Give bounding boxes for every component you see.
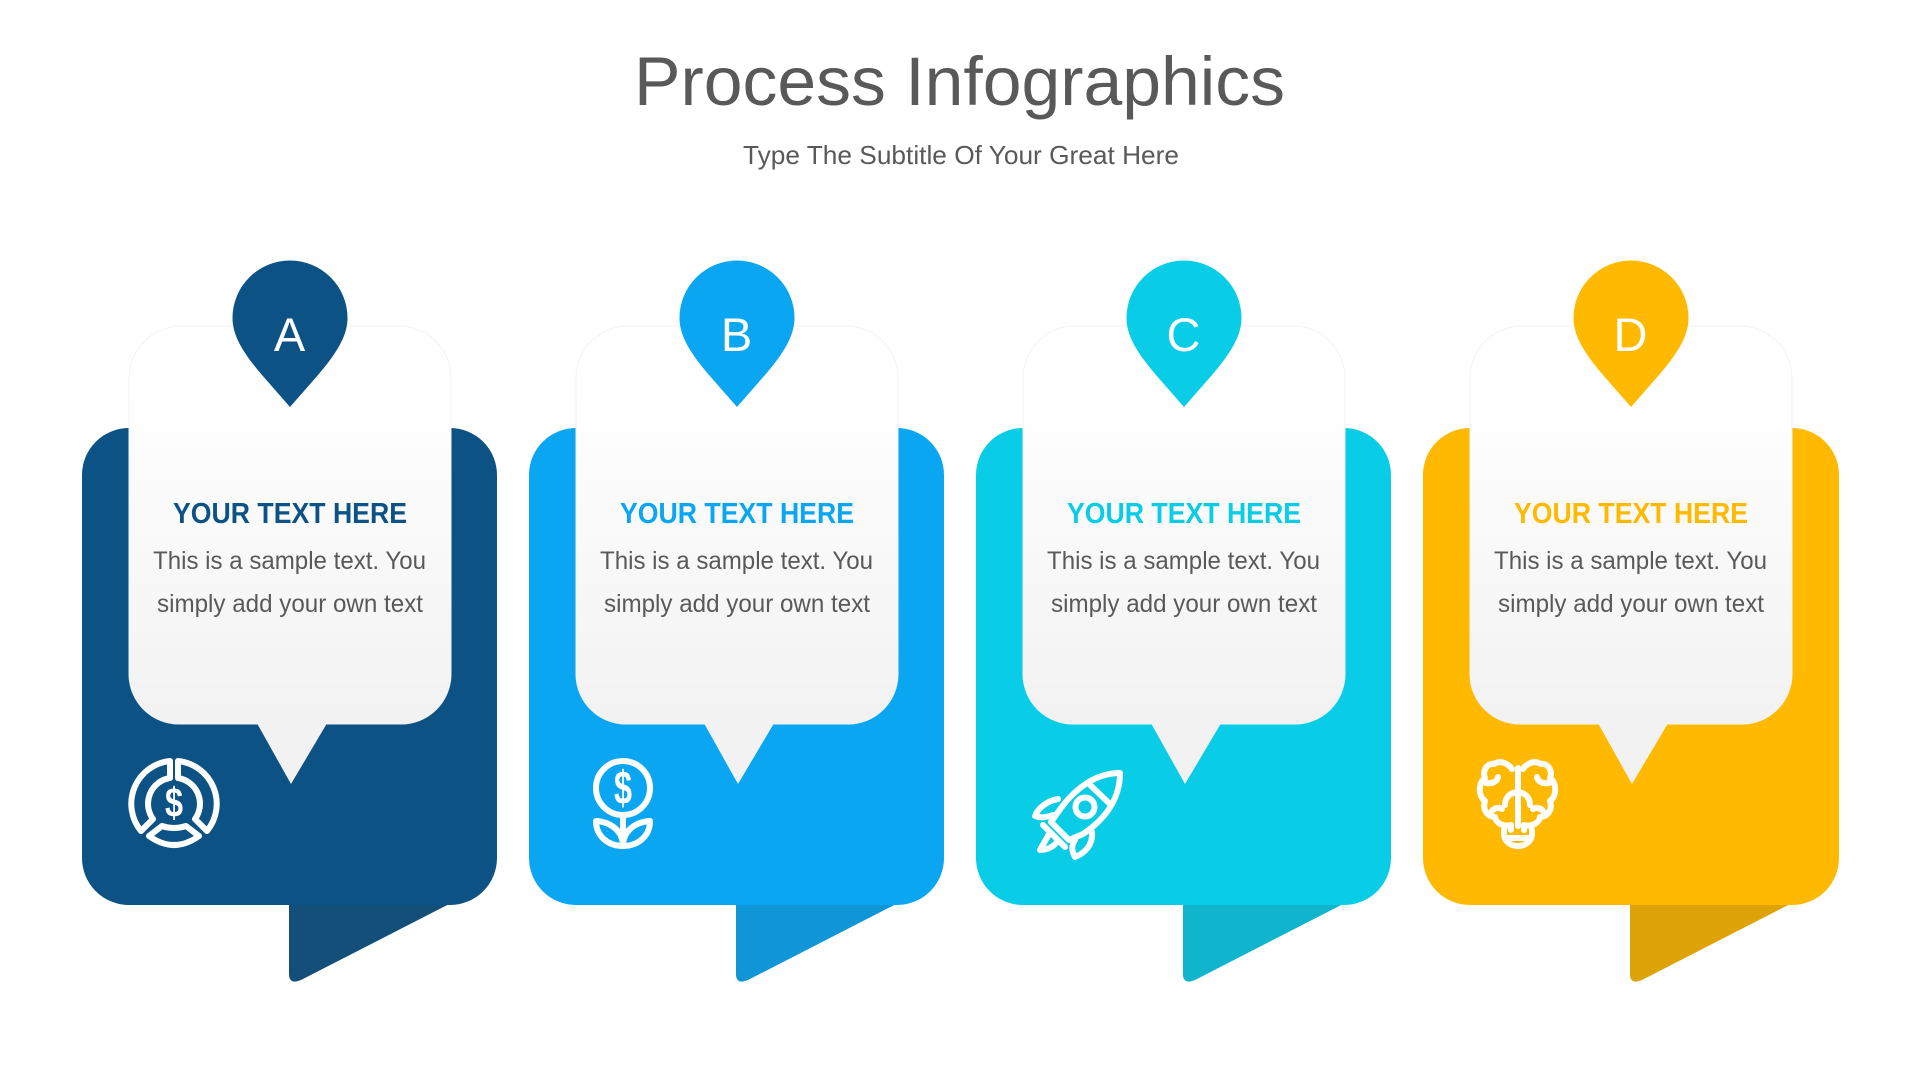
icon: money plant	[596, 761, 650, 846]
body text B	[600, 547, 873, 618]
pin A	[232, 260, 348, 407]
heading B: YOUR TEXT HERE	[620, 498, 854, 530]
icon: brain light bulb	[1480, 762, 1555, 846]
body text A	[153, 547, 426, 618]
pin letter D: D	[1614, 308, 1647, 361]
body text A: simply add your own text	[157, 590, 423, 618]
folded tail C	[1183, 900, 1351, 982]
coloured base B	[529, 428, 944, 905]
pin letter C: C	[1167, 308, 1200, 361]
heading A: YOUR TEXT HERE	[173, 498, 407, 530]
pin B	[680, 260, 794, 407]
icon: dollar segmented chart	[131, 761, 217, 845]
body text C	[1047, 547, 1320, 618]
icon: dollar segmented chart: $	[165, 779, 183, 826]
body text B: This is a sample text. You	[600, 547, 873, 575]
panel: card D	[1423, 260, 1839, 982]
speech bubble B	[576, 326, 898, 783]
pin letter B: B	[721, 308, 752, 361]
heading D: YOUR TEXT HERE	[1514, 498, 1748, 530]
body text C: simply add your own text	[1051, 590, 1317, 618]
title: Process Infographics	[634, 43, 1285, 120]
pin letter A: A	[274, 308, 306, 361]
folded tail B	[736, 900, 904, 982]
body text B: simply add your own text	[604, 590, 870, 618]
pin D	[1574, 260, 1688, 407]
panel: card A	[82, 260, 497, 982]
icon: money plant: $	[614, 761, 632, 814]
panel: card C	[976, 260, 1391, 982]
pin C	[1126, 260, 1242, 407]
body text D: simply add your own text	[1498, 590, 1764, 618]
body text D: This is a sample text. You	[1494, 547, 1767, 575]
coloured base C	[976, 428, 1391, 905]
folded tail D	[1630, 900, 1798, 982]
body text C: This is a sample text. You	[1047, 547, 1320, 575]
icon: rocket	[1035, 773, 1120, 857]
body text D	[1494, 547, 1767, 618]
panel: card B	[529, 260, 944, 982]
coloured base D	[1423, 428, 1839, 905]
subtitle: Type The Subtitle Of Your Great Here	[743, 140, 1179, 170]
speech bubble C	[1023, 326, 1345, 783]
body text A: This is a sample text. You	[153, 547, 426, 575]
speech bubble D	[1470, 326, 1792, 783]
heading C: YOUR TEXT HERE	[1067, 498, 1301, 530]
folded tail A	[289, 900, 457, 982]
coloured base A	[82, 428, 497, 905]
speech bubble A	[129, 326, 451, 783]
